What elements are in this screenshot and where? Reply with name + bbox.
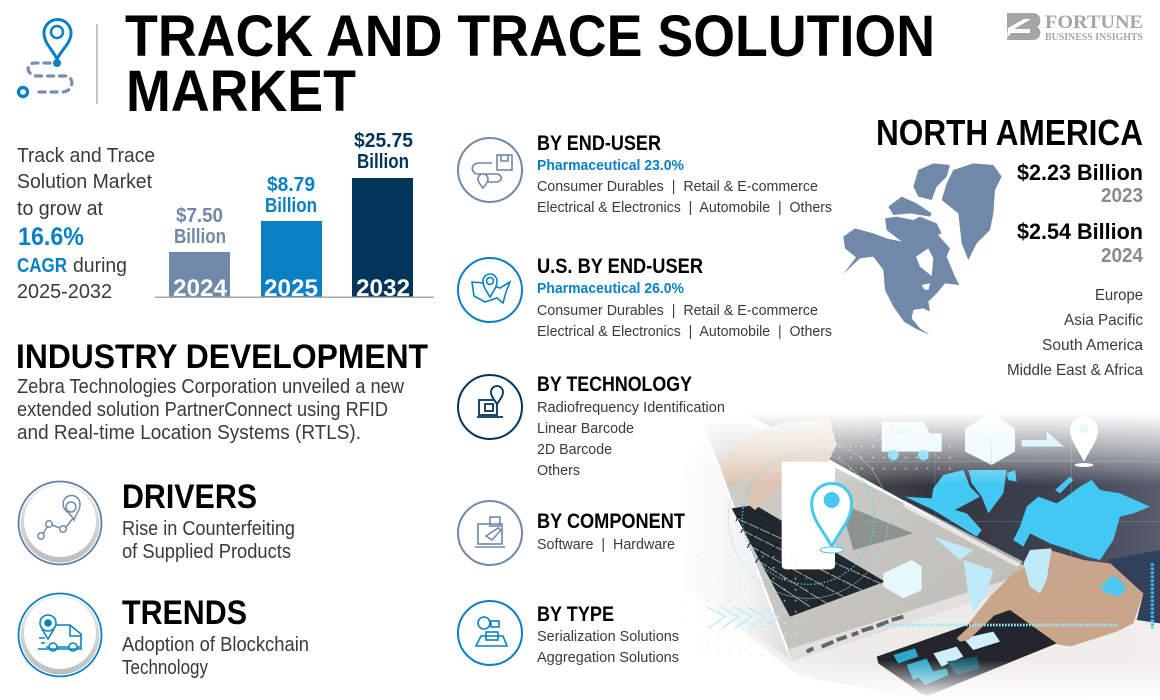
segment: U.S. by end-user: Consumer Durables | Retail & E-commerce [537, 302, 818, 319]
header icon: route with location pin [18, 20, 72, 96]
trends panel [18, 594, 309, 679]
segment: by component: BY COMPONENT [537, 510, 685, 533]
segment: by component [458, 501, 685, 565]
drivers panel: Rise in Counterfeiting [122, 518, 295, 540]
bar 2024: $7.50 [176, 205, 223, 227]
title: MARKET [126, 59, 356, 124]
segment: U.S. by end-user: Pharmaceutical 26.0% [537, 280, 684, 297]
photo: cyan north america, under the hinge [933, 537, 993, 613]
logo: Fortune Business Insights: BUSINESS INSIGHTS [1045, 32, 1143, 43]
bar 2025 [261, 174, 322, 302]
industry development heading: INDUSTRY DEVELOPMENT [16, 338, 428, 376]
photo illustration: laptop, phone, hand and cyan world map [640, 395, 1160, 700]
photo: truck hologram [882, 422, 942, 460]
segment: by end-user: Electrical & Electronics | Automobile | Others [537, 199, 832, 216]
photo: hinge reflection [903, 500, 1023, 567]
title [125, 4, 935, 124]
segment: by end-user: Pharmaceutical 23.0% [537, 157, 684, 174]
title: TRACK AND TRACE SOLUTION [125, 4, 935, 69]
bar 2024 [169, 205, 230, 302]
bar 2032: $25.75 [354, 130, 413, 152]
industry development text [17, 376, 405, 444]
icon: laptop with hand and box [458, 501, 522, 565]
growth text block: Solution Market [17, 171, 152, 193]
photo: left hand [720, 420, 837, 510]
bar 2025: 2025 [264, 275, 318, 302]
region values [1017, 160, 1144, 267]
photo: right hand [957, 550, 1143, 647]
logo: Fortune Business Insights: FORTUNE [1045, 12, 1143, 33]
segment: by technology: Radiofrequency Identification [537, 399, 725, 416]
bar 2024: Billion [174, 226, 226, 248]
trends panel: Adoption of Blockchain [122, 634, 309, 656]
segment: U.S. by end-user: Electrical & Electronics | Automobile | Others [537, 323, 832, 340]
photo: phone hologram with pin [782, 462, 835, 569]
segment: by end-user [458, 132, 832, 216]
bar 2024: 2024 [173, 275, 228, 302]
segment: by end-user: Consumer Durables | Retail & E-commerce [537, 178, 818, 195]
growth text block: CAGR [17, 255, 67, 277]
photo: laptop lid [653, 420, 790, 660]
icon: delivery truck with pin [18, 594, 102, 676]
growth text block: during [73, 255, 127, 277]
segment: by technology [458, 373, 725, 479]
photo: laptop deck [703, 423, 1027, 653]
segment: by type [458, 601, 679, 666]
map: North America [843, 163, 1002, 335]
growth text block [17, 145, 155, 303]
segment: by type: Serialization Solutions [537, 628, 679, 645]
bar 2032: Billion [357, 151, 409, 173]
photo: left fade [640, 420, 730, 700]
photo: box and arrow holograms [965, 413, 1015, 465]
segment: U.S. by end-user [458, 255, 832, 340]
other regions list: Asia Pacific [1064, 312, 1143, 329]
segment: by type: Aggregation Solutions [537, 649, 679, 666]
segment: by type: BY TYPE [537, 603, 614, 626]
logo: Fortune Business Insights [1007, 12, 1143, 43]
icon: logistics map [458, 601, 522, 665]
header divider [96, 24, 98, 104]
icon: route line with pin [18, 482, 102, 564]
photo: top fade [640, 395, 1160, 485]
segment: by technology: Linear Barcode [537, 420, 634, 437]
trends panel: Technology [122, 657, 208, 679]
segment: by technology: 2D Barcode [537, 441, 612, 458]
icon: U.S. map with pin [458, 258, 522, 322]
segment: by end-user: BY END-USER [537, 132, 661, 155]
segment: by technology: BY TECHNOLOGY [537, 373, 692, 396]
growth text block: 16.6% [18, 223, 84, 251]
industry development text: Zebra Technologies Corporation unveiled a new [17, 376, 405, 398]
growth text block: Track and Trace [17, 145, 155, 167]
industry development text: extended solution PartnerConnect using RFID [17, 399, 388, 421]
other regions list: Europe [1095, 287, 1143, 304]
segment: by technology: Others [537, 462, 580, 479]
photo: cyan world map [905, 470, 1150, 560]
segment: U.S. by end-user: U.S. BY END-USER [537, 255, 703, 278]
trends panel: TRENDS [122, 594, 247, 632]
drivers panel: of Supplied Products [122, 541, 291, 563]
photo: truck hologram: 24h [888, 425, 909, 439]
growth text block: 2025-2032 [17, 281, 112, 303]
bar 2032: 2032 [356, 275, 410, 302]
photo: dots and grid lines [813, 410, 953, 473]
photo: dark backdrop [740, 410, 1160, 567]
photo: bottom fade [640, 660, 1160, 700]
other regions list: Middle East & Africa [1007, 362, 1143, 379]
region values: $2.54 Billion [1017, 219, 1143, 244]
region values: 2024 [1101, 245, 1144, 267]
photo: smartphone [877, 610, 1057, 695]
bar 2025: $8.79 [267, 174, 315, 196]
bar 2032 [352, 130, 413, 302]
bar 2025: Billion [265, 195, 317, 217]
growth text block: to grow at [17, 198, 103, 220]
bar chart [155, 130, 434, 302]
other regions list: South America [1042, 337, 1143, 354]
photo: side ports [807, 617, 903, 652]
drivers panel [18, 478, 295, 564]
segment: by component: Software | Hardware [537, 536, 675, 553]
region values: $2.23 Billion [1017, 160, 1143, 185]
icon: parcel route [458, 138, 522, 202]
industry development text: and Real-time Location Systems (RTLS). [17, 422, 361, 444]
photo: table [640, 550, 1160, 700]
other regions list [1007, 287, 1143, 379]
icon: laptop with parcel pin [458, 375, 522, 439]
drivers panel: DRIVERS [122, 478, 257, 516]
photo: keyboard [732, 505, 885, 617]
region values: 2023 [1101, 185, 1143, 207]
